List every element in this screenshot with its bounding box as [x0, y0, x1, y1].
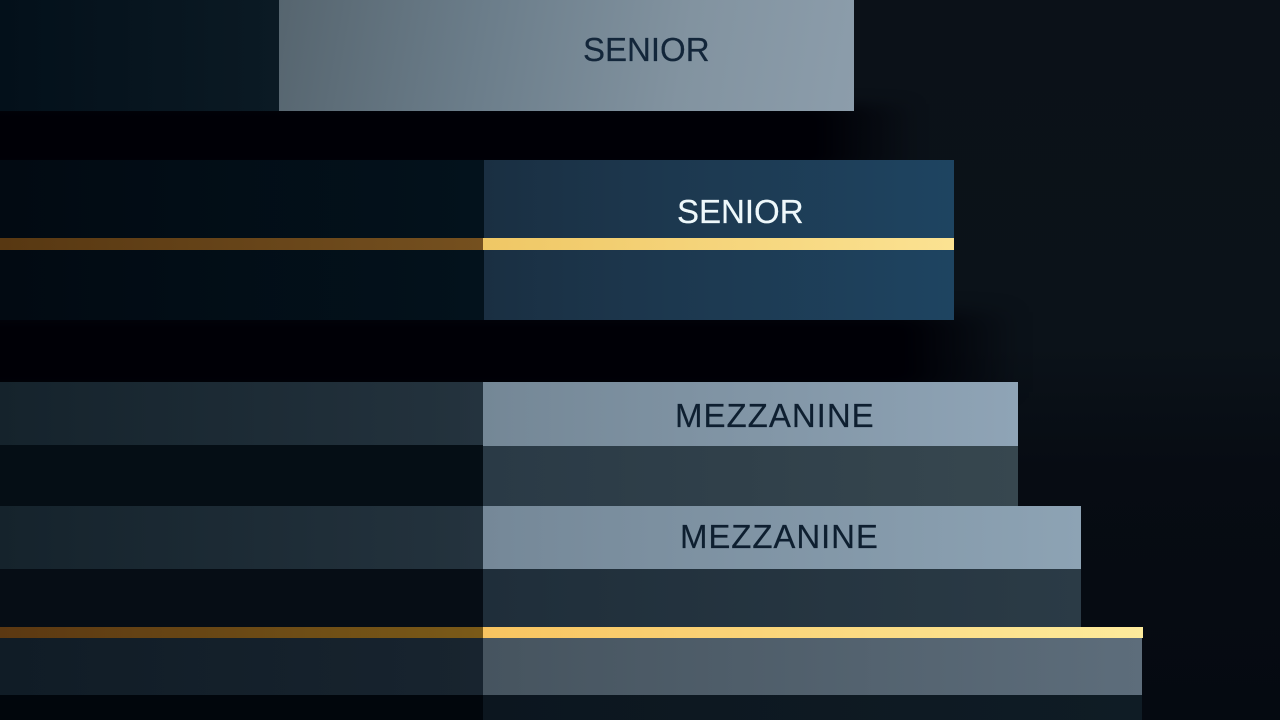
left upper band: [0, 382, 483, 445]
gold line, dim section: [0, 238, 483, 250]
gold line, bright section: [483, 627, 1143, 638]
mezzanine block, shade: [483, 569, 1081, 628]
left lower band: [0, 445, 483, 506]
left upper band: [0, 638, 483, 695]
mezzanine block, light: [483, 382, 1018, 446]
mezzanine block, light: [483, 506, 1081, 569]
dark shadow band below row 1: [0, 104, 920, 170]
label: senior: SENIOR: [677, 193, 804, 230]
label: mezzanine: MEZZANINE: [675, 397, 875, 434]
senior block, light grey: [279, 0, 854, 111]
tier row 2: senior with gold line: [0, 160, 954, 320]
left upper band: [0, 506, 483, 569]
tier row 3: mezzanine: [0, 382, 1018, 506]
tier row 4: mezzanine: [0, 506, 1081, 627]
base block, mid grey: [483, 638, 1142, 695]
left shaded extension: [0, 160, 484, 320]
left shaded extension: [0, 0, 279, 111]
label: mezzanine: MEZZANINE: [680, 518, 879, 555]
base block, shade: [483, 695, 1142, 720]
label: senior: SENIOR: [583, 31, 710, 68]
mezzanine block, shade: [483, 446, 1018, 506]
left lower band: [0, 695, 483, 720]
gold line, bright section: [483, 238, 954, 250]
tier row 1: senior: [0, 0, 854, 111]
tier row 5: base tier with gold line: [0, 627, 1143, 720]
senior block, navy: [484, 160, 954, 320]
left lower band: [0, 569, 483, 628]
gold line, dim section: [0, 627, 483, 638]
dark shadow band below row 2: [0, 312, 1020, 392]
